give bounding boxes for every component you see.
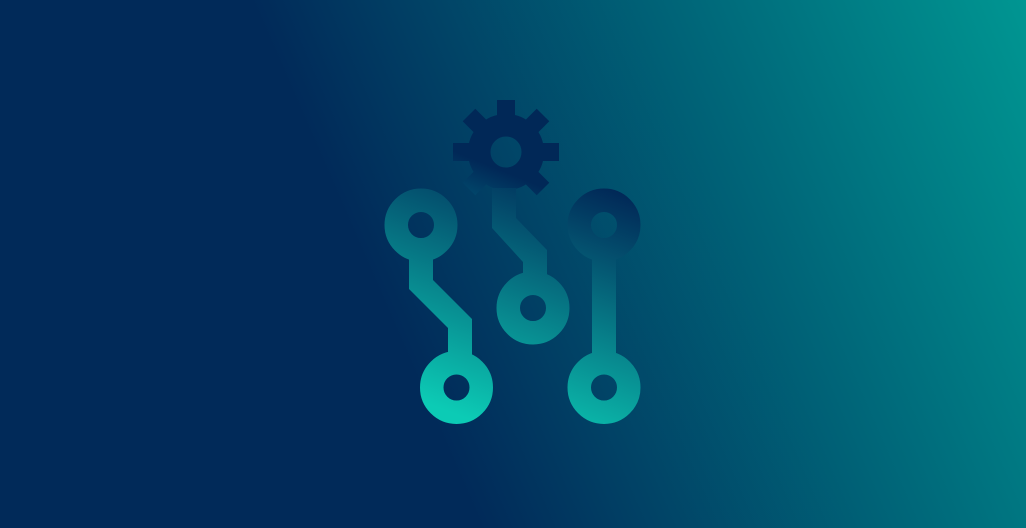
icon: circuit trace middle: [492, 188, 558, 333]
icon: circuit trace right: [579, 200, 629, 412]
icon: gear: [453, 100, 559, 195]
icon: circuit trace left: [396, 200, 481, 412]
